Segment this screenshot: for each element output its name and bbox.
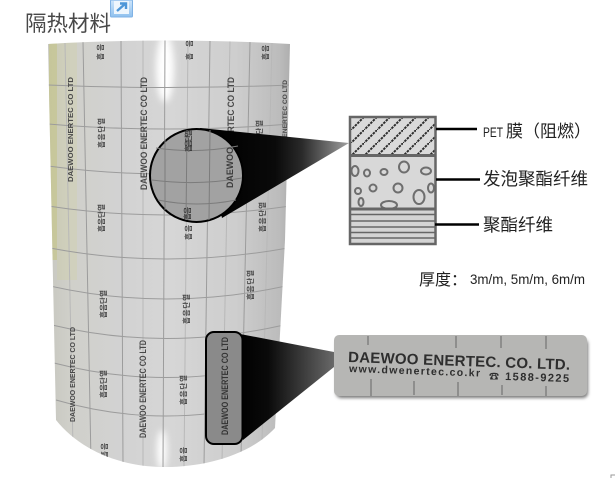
printed marks: 흡음단열 — [96, 204, 106, 232]
printed marks: 흡음단열 — [178, 375, 188, 405]
printed marks: 흡음단열 — [257, 202, 267, 232]
printed marks: 흡음 — [178, 447, 188, 462]
printed marks: 흡음단열 — [245, 270, 255, 300]
printed marks: 흡음단열 — [98, 370, 108, 398]
title: 隔热材料 — [25, 12, 111, 36]
leader lines — [435, 129, 480, 224]
printed marks: 흡음단열 — [254, 120, 264, 150]
printed marks: DAEWOO ENERTEC CO LTD — [139, 77, 149, 190]
funnel: label zoom — [240, 334, 334, 440]
layer diagram — [350, 117, 436, 244]
magnifier circle: 흡음단열 — [183, 130, 193, 152]
printed marks: DAEWOO ENERTEC CO LTD — [66, 76, 75, 182]
printed marks: 흡음 — [99, 443, 109, 458]
printed marks: 흡음 — [183, 225, 193, 240]
funnel: circle zoom to layers — [200, 128, 349, 218]
label plate: ☎ — [489, 372, 499, 383]
label: PET film: PET — [483, 124, 503, 140]
cylinder roll — [48, 40, 290, 467]
label: polyester fibre: 聚酯纤维 — [483, 215, 553, 235]
printed marks: DAEWOO ENERTEC CO LTD — [138, 340, 148, 438]
magnifier circle: 흡음 — [182, 207, 192, 220]
printed marks: 흡음단열 — [96, 118, 106, 148]
label plate: 1588-9225 — [505, 371, 569, 385]
icon: external link — [110, 0, 132, 17]
magnifier rounded rectangle — [206, 332, 242, 444]
printed marks: 흡음 — [95, 44, 105, 60]
printed marks: 흡음단열 — [98, 290, 108, 318]
label: PET film: 膜（阻燃） — [506, 122, 591, 141]
layer: PET film — [350, 118, 436, 156]
printed marks: 흡음 — [260, 45, 270, 60]
label plate: www.dwenertec.co.kr — [348, 363, 480, 380]
printed marks — [66, 40, 289, 462]
magnifier rounded rectangle: DAEWOO ENERTEC CO LTD — [220, 337, 230, 435]
layer: polyester fibre — [351, 210, 435, 244]
label: thickness: 厚度： — [419, 272, 467, 289]
printed marks: 흡음 — [184, 40, 194, 60]
grid lines — [48, 40, 290, 468]
printed marks: DAEWOO ENERTEC CO LTD — [226, 77, 236, 190]
printed marks: DAEWOO ENERTEC CO LTD — [68, 326, 77, 422]
layer: foam — [351, 157, 435, 209]
label plate: DAEWOO ENERTEC. CO. LTD. — [348, 349, 570, 374]
printed marks: DAEWOO ENERTEC CO LTD — [283, 79, 289, 170]
corner mark — [611, 475, 615, 478]
magnifier circle: DAEWOO — [225, 147, 235, 188]
label: thickness: 3m/m, 5m/m, 6m/m — [470, 271, 585, 287]
magnifier circle — [150, 129, 243, 222]
label: foam polyester: 发泡聚酯纤维 — [483, 169, 588, 189]
label plate — [334, 335, 588, 398]
printed marks: 흡음단열 — [181, 294, 191, 324]
